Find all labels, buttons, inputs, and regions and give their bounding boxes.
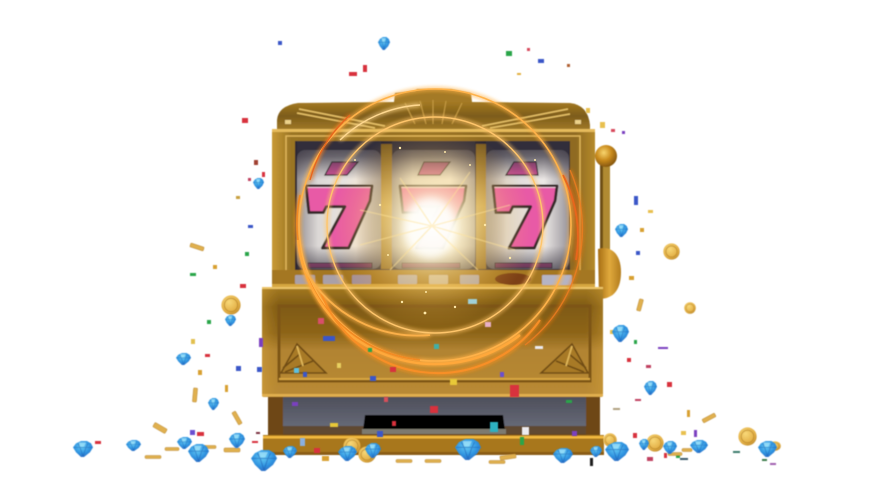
sparkle dust — [354, 147, 536, 314]
confetti — [95, 41, 776, 466]
blue gems — [73, 37, 777, 471]
reel 2 — [392, 141, 475, 269]
coins — [221, 243, 781, 463]
reel window — [295, 141, 570, 270]
cabinet body — [262, 287, 603, 397]
panel ornament left — [281, 344, 326, 373]
lower cabinet posts and recess — [268, 394, 600, 438]
central light burst — [332, 126, 536, 326]
slot machine — [262, 89, 621, 455]
reel 3 — [486, 141, 569, 269]
main frame — [272, 129, 595, 291]
reel separators — [381, 144, 486, 269]
top crest — [277, 89, 590, 130]
base — [263, 435, 604, 455]
energy rings — [297, 89, 582, 373]
reel 1 — [297, 141, 381, 269]
panel ornament right — [541, 344, 588, 373]
coin slot — [362, 415, 506, 434]
lever — [595, 145, 621, 299]
gold bars — [145, 243, 716, 464]
button row — [272, 270, 595, 290]
